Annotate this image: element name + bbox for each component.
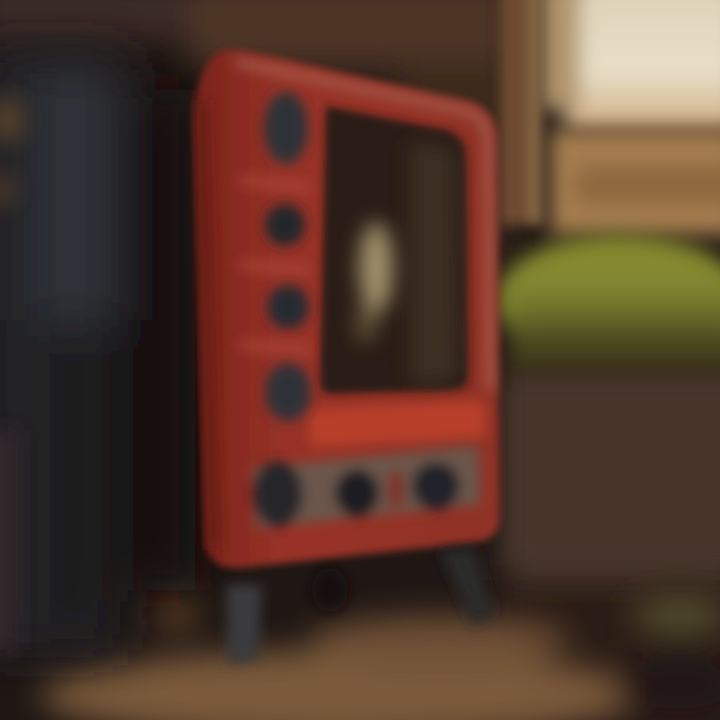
background: brown low wall right (510, 380, 720, 565)
cabinet: lighter screen area (410, 140, 458, 385)
background: tan distant field (550, 130, 720, 235)
background: brown brick wall top (0, 0, 510, 250)
cabinet: horizontal red bands beside knobs (240, 180, 310, 350)
background: dirt ground (40, 590, 720, 720)
cabinet: lower control panel (252, 446, 480, 528)
background: wooden post (500, 0, 542, 225)
background: dark machinery at left (0, 50, 195, 650)
cabinet (194, 50, 500, 568)
cabinet: vertical knob column (264, 92, 311, 421)
background: lower right wall shade (505, 370, 720, 720)
cabinet: orange panel under screen (310, 400, 486, 446)
cabinet: top edge highlight (236, 62, 490, 390)
cabinet: pale figure on screen (355, 222, 393, 343)
background: warm specks on left machinery (0, 96, 26, 650)
cabinet: left red side shading (202, 100, 214, 550)
cabinet: dark screen (320, 106, 468, 394)
background: green bush (495, 234, 720, 375)
background: bright sky top right (540, 0, 720, 130)
cabinet: red body (194, 50, 500, 568)
cabinet feet (226, 548, 494, 664)
